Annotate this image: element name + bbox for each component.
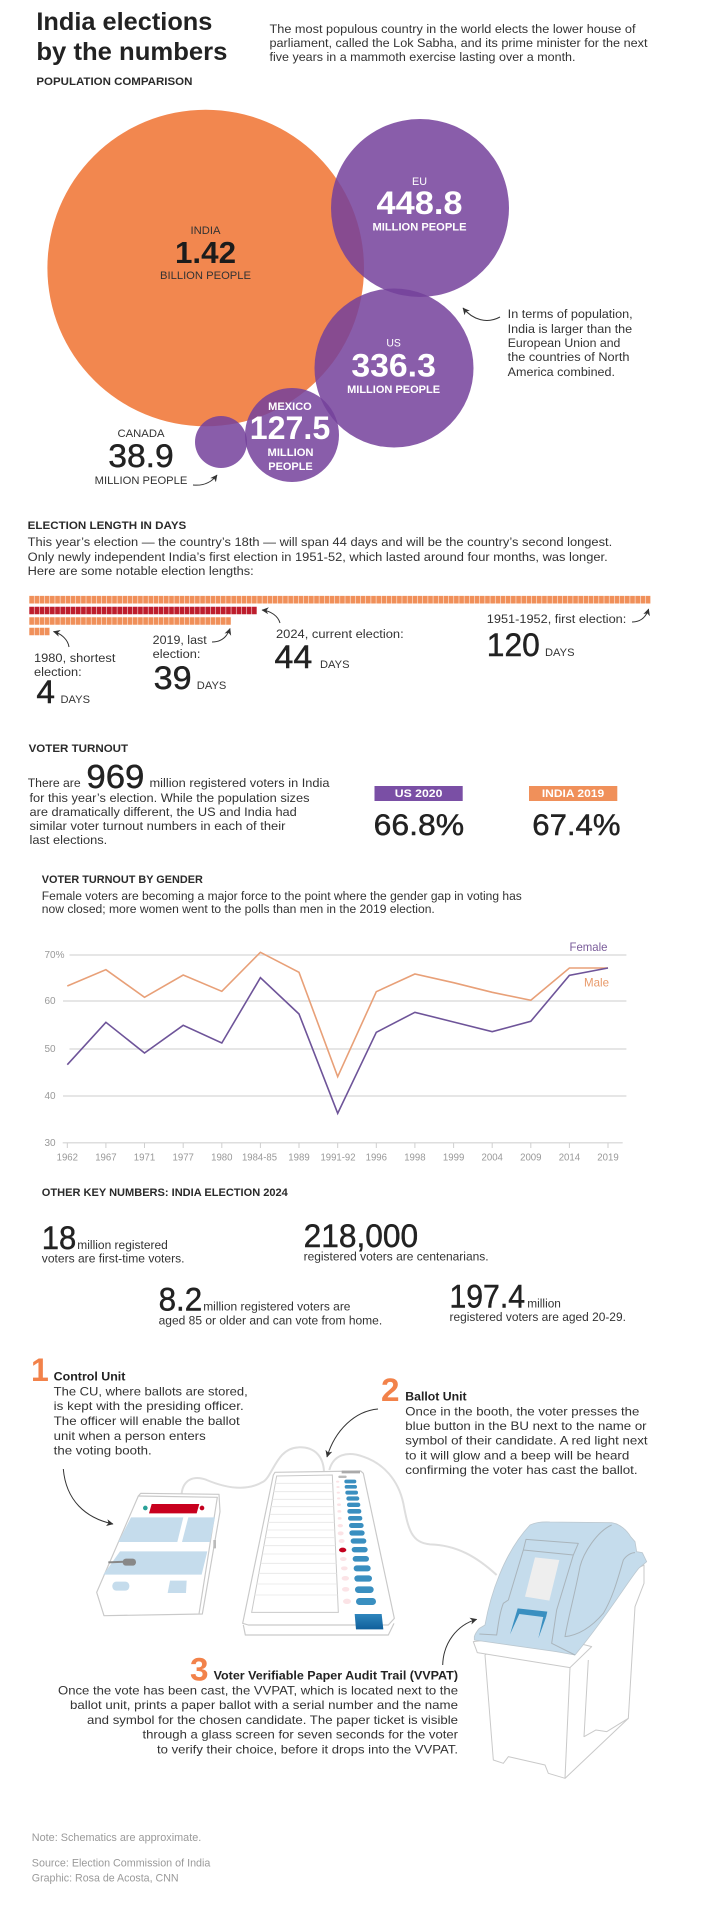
label: India: INDIA: [190, 225, 221, 237]
label: 2019: election:: [153, 647, 200, 661]
stat: 18 million: [42, 1220, 184, 1266]
label: EU: 448.8: [376, 185, 462, 221]
text: registered voters: similar voter turnout numbers in each of their: [30, 819, 285, 833]
y axis labels: 70%: [44, 950, 65, 961]
step 1: control unit text: the voting booth.: [54, 1443, 152, 1457]
label: EU: [372, 176, 466, 234]
text: gender intro: now closed; more women went to the polls than men in the 2019 election.: [42, 902, 435, 916]
x axis labels: 1984-85: [242, 1153, 277, 1164]
legend: female: Female: [570, 940, 608, 954]
label: US: MILLION PEOPLE: [347, 384, 440, 396]
stat: 8.2 million: [159, 1282, 382, 1327]
label: 1951-52: DAYS: [545, 647, 574, 659]
stat: 197.4 million: 197.4: [450, 1278, 525, 1314]
stat: US 2020: [374, 786, 464, 842]
bar chart: election lengths: [29, 600, 651, 632]
text: registered voters: last elections.: [30, 833, 107, 847]
label: Mexico: MILLION: [268, 447, 314, 459]
step 3: VVPAT text: to verify their choice, before it drops into the VVPAT.: [157, 1742, 458, 1756]
cables between devices: [182, 1447, 497, 1575]
stat: 8.2 million: million registered voters are: [203, 1300, 351, 1314]
label: 1980: [34, 651, 116, 710]
label: Mexico: PEOPLE: [268, 461, 313, 473]
stat: US 2020: US 2020: [395, 788, 442, 800]
arrow: 1951-52: [632, 609, 649, 622]
text: registered voters: are dramatically different, the US and India had: [30, 805, 297, 819]
bubble: India: [47, 110, 364, 426]
label: 1951-52: [487, 612, 626, 663]
callout: population: India is larger than the: [508, 322, 632, 336]
title: India elections: [36, 8, 212, 36]
stat: 18 million: voters are first-time voters.: [42, 1252, 184, 1266]
label: US: US: [386, 338, 401, 350]
stat: 18 million: 18: [42, 1220, 76, 1256]
stat: 197.4 million: million: [527, 1296, 561, 1310]
label: US: 336.3: [351, 348, 436, 384]
step 2: ballot unit text: to it will glow and a beep will be heard: [405, 1449, 629, 1463]
step 2: ballot unit text: [381, 1372, 648, 1477]
stat: 197.4 million: registered voters are aged 20-29.: [450, 1310, 626, 1324]
step 2: ballot unit text: confirming the voter has cast the ballot.: [405, 1463, 638, 1477]
y axis labels: 30: [44, 1138, 56, 1149]
intro text: The most populous country in the world elects the lower house of: [270, 22, 636, 36]
arrow: 2019: [212, 628, 230, 642]
x axis labels: 1998: [404, 1153, 426, 1164]
label: 2019: 39: [154, 660, 192, 696]
text: registered voters: for this year’s election. While the population sizes: [30, 791, 310, 805]
legend: male: Male: [584, 976, 609, 990]
x axis labels: [57, 1153, 619, 1164]
text: gender intro: Female voters are becoming a major force to the point where the gender gap in voting has: [42, 889, 522, 903]
arrow: control unit: [63, 1469, 113, 1524]
label: 2019: 2019, last: [153, 633, 207, 647]
step 3: VVPAT text: through a glass screen for seven seconds for the voter: [142, 1728, 458, 1742]
arrow: VVPAT: [443, 1619, 477, 1665]
label: India: [160, 225, 251, 282]
stat: 18 million: million registered: [77, 1238, 168, 1252]
text: election length intro: Here are some notable election lengths:: [28, 564, 254, 578]
number 3: 3: [190, 1652, 208, 1688]
text: registered voters: [28, 758, 330, 847]
label: 2019: [153, 633, 226, 696]
x axis labels: 2009: [520, 1153, 542, 1164]
bubble chart: population: [47, 110, 509, 487]
step 1: control unit text: Control Unit: [54, 1370, 125, 1384]
x axis labels: 2019: [597, 1153, 619, 1164]
text: registered voters: There are: [28, 776, 81, 790]
callout: population: In terms of population,: [508, 307, 633, 321]
step 3: VVPAT text: Voter Verifiable Paper Audit Trail (VVPAT): [214, 1668, 458, 1682]
x axis labels: 1980: [211, 1153, 233, 1164]
label: 1980: election:: [34, 665, 82, 679]
number 2: 2: [381, 1372, 400, 1408]
stat: 218,000: registered voters are centenarians.: [304, 1250, 489, 1264]
illustration: control unit: [97, 1493, 220, 1616]
step 2: ballot unit text: symbol of their candidate. A red light next: [405, 1434, 648, 1448]
line: female: [67, 968, 608, 1113]
footer notes: Graphic: Rosa de Acosta, CNN: [32, 1873, 179, 1885]
x axis labels: 1989: [288, 1153, 310, 1164]
number 1: 1: [31, 1352, 49, 1388]
label: EU: MILLION PEOPLE: [372, 222, 466, 234]
bubble: Canada: [195, 416, 247, 468]
callout: population: the countries of North: [508, 350, 630, 364]
stat: 8.2 million: aged 85 or older and can vote from home.: [159, 1313, 382, 1327]
x axis labels: 1996: [366, 1153, 387, 1164]
heading: voter turnout: VOTER TURNOUT: [29, 743, 128, 755]
title: by the numbers: [36, 38, 227, 66]
step 2: ballot unit text: Once in the booth, the voter presses the: [405, 1404, 640, 1418]
callout: population: [508, 307, 633, 379]
label: 1951-52: 1951-1952, first election:: [487, 612, 626, 626]
x axis labels: 1962: [57, 1153, 78, 1164]
stat: 8.2 million: 8.2: [159, 1282, 202, 1318]
label: Mexico: [250, 401, 330, 473]
label: 1980: 1980, shortest: [34, 651, 116, 665]
illustration: ballot unit: [243, 1471, 394, 1635]
arrow: 2024: [262, 610, 280, 623]
label: 1980: 4: [36, 674, 55, 710]
label: India: BILLION PEOPLE: [160, 270, 251, 282]
step 3: VVPAT text: ballot unit, prints a paper ballot with a serial number and the name: [70, 1698, 458, 1712]
stat: US 2020: 66.8%: [374, 809, 464, 842]
heading: election length: ELECTION LENGTH IN DAYS: [28, 520, 186, 532]
step 1: control unit text: The officer will enable the ballot: [54, 1414, 240, 1428]
title: [36, 8, 227, 66]
step 2: ballot unit text: Ballot Unit: [405, 1390, 467, 1404]
line: male: [67, 952, 608, 1077]
illustration: VVPAT: [473, 1522, 647, 1778]
step 2: ballot unit text: blue button in the BU next to the name or: [405, 1419, 647, 1433]
step 3: VVPAT text: Once the vote has been cast, the VVPAT, which is located next to the: [58, 1683, 458, 1697]
footer notes: Source: Election Commission of India: [32, 1858, 211, 1870]
stat: 218,000: 218,000: [304, 1218, 418, 1254]
label: 2024: [274, 627, 404, 675]
step 1: control unit text: [31, 1352, 248, 1457]
label: EU: EU: [412, 176, 427, 188]
stat: 197.4 million: [450, 1278, 626, 1324]
arrow: callout: [463, 308, 500, 320]
arrow: 1980: [54, 632, 69, 647]
arrow: to Canada: [193, 475, 217, 485]
footer notes: Note: Schematics are approximate.: [32, 1832, 201, 1844]
y axis labels: 40: [44, 1091, 56, 1102]
label: 1980: DAYS: [60, 694, 90, 706]
label: Mexico: MEXICO: [268, 401, 312, 413]
step 1: control unit text: The CU, where ballots are stored,: [54, 1385, 248, 1399]
bubble: Mexico: [245, 388, 339, 482]
label: 2024: DAYS: [320, 659, 350, 671]
stat: 218,000: [304, 1218, 489, 1264]
x axis labels: 1999: [443, 1153, 465, 1164]
step 3: VVPAT text: [58, 1652, 458, 1756]
x axis labels: 1971: [134, 1153, 156, 1164]
bubble: US: [314, 288, 474, 448]
text: gender intro: [42, 889, 522, 916]
step 3: VVPAT text: and symbol for the chosen candidate. The paper ticket is visible: [87, 1713, 458, 1727]
y axis labels: 60: [44, 996, 56, 1007]
footer notes: [32, 1832, 211, 1885]
label: Canada: [95, 428, 187, 487]
arrow: ballot unit: [327, 1409, 378, 1457]
label: 2019: DAYS: [197, 680, 226, 692]
text: election length intro: Only newly independent India’s first election in 1951-52, which lasted around four months, was longer.: [28, 550, 608, 564]
label: 1951-52: 120: [487, 627, 540, 663]
intro text: parliament, called the Lok Sabha, and its prime minister for the next: [270, 36, 648, 50]
label: Canada: 38.9: [108, 438, 174, 474]
step 1: control unit text: unit when a person enters: [54, 1429, 206, 1443]
bubble: EU: [331, 119, 509, 297]
stat: India 2019: [529, 786, 620, 842]
text: election length intro: [28, 535, 612, 578]
x axis labels: 2004: [482, 1153, 503, 1164]
text: election length intro: This year’s election — the country’s 18th — will span 44 days and will be the country’s second longest.: [28, 535, 612, 549]
heading: turnout by gender: VOTER TURNOUT BY GENDER: [42, 874, 203, 886]
label: Canada: MILLION PEOPLE: [95, 475, 187, 487]
label: US: [347, 338, 440, 396]
x axis labels: 2014: [559, 1153, 581, 1164]
y axis labels: 50: [44, 1044, 56, 1055]
stat: India 2019: INDIA 2019: [542, 788, 604, 800]
x axis labels: 1967: [95, 1153, 117, 1164]
intro text: [270, 22, 648, 64]
text: registered voters: million registered voters in India: [150, 776, 330, 790]
line chart: voter turnout by gender: [44, 940, 626, 1164]
label: 2024: 2024, current election:: [276, 627, 404, 641]
text: registered voters: 969: [86, 758, 144, 795]
x axis labels: 1991-92: [320, 1153, 356, 1164]
stat: India 2019: 67.4%: [532, 809, 620, 842]
step 1: control unit text: is kept with the presiding officer.: [54, 1399, 244, 1413]
label: Canada: CANADA: [118, 428, 165, 440]
heading: population comparison: POPULATION COMPARISON: [36, 76, 192, 88]
x axis labels: 1977: [172, 1153, 194, 1164]
label: Mexico: 127.5: [250, 410, 330, 446]
intro text: five years in a mammoth exercise lasting over a month.: [270, 50, 576, 64]
callout: population: America combined.: [508, 365, 615, 379]
label: India: 1.42: [175, 235, 236, 270]
y axis labels: [44, 950, 65, 1149]
label: 2024: 44: [274, 639, 312, 675]
callout: population: European Union and: [508, 336, 621, 350]
heading: other key numbers: OTHER KEY NUMBERS: INDIA ELECTION 2024: [42, 1187, 289, 1199]
